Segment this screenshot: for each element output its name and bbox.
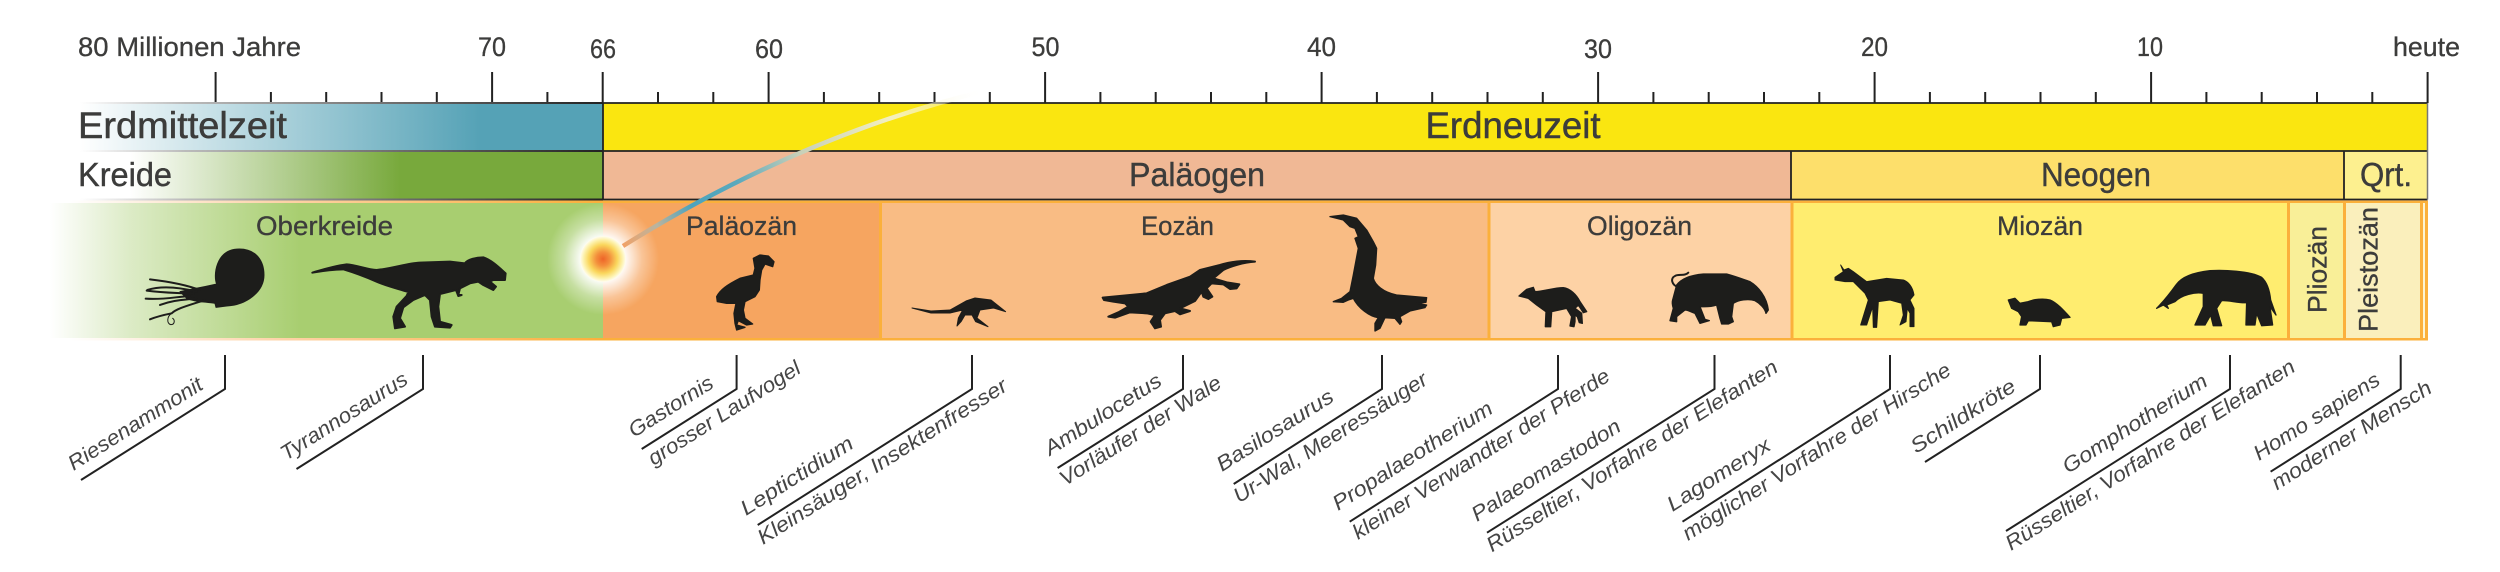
callout: Lagomeryx: Lagomeryx bbox=[1663, 433, 1776, 516]
epoch: Pliozän: Pliozän bbox=[2302, 226, 2332, 313]
period: Neogen: Neogen bbox=[2041, 156, 2151, 193]
period: Kreide bbox=[78, 151, 603, 200]
era: Erdmittelzeit bbox=[78, 103, 603, 151]
period: Quartär: Qrt. bbox=[2360, 156, 2412, 193]
callout: Schildkröte: Schildkröte bbox=[1906, 375, 2020, 458]
epoch: Paläozän: Paläozän bbox=[686, 211, 797, 241]
epoch: Pliozän bbox=[2288, 203, 2344, 338]
epoch: Miozän: Miozän bbox=[1997, 211, 2083, 241]
epoch: Eozän bbox=[880, 203, 1488, 338]
icon: ambulocetus bbox=[1103, 261, 1255, 328]
callout: Gomphotherium: Rüsseltier, Vorfahre der Elefanten bbox=[2001, 355, 2299, 555]
callout: Riesenammonit bbox=[64, 355, 225, 480]
era: Erdmittelzeit: Erdmittelzeit bbox=[78, 105, 288, 146]
period: Neogen bbox=[1791, 151, 2344, 200]
callout: Lagomeryx: möglicher Vorfahre der Hirsche bbox=[1678, 359, 1955, 545]
axis labels: 70 bbox=[478, 32, 506, 62]
callout: Homo sapiens: moderner Mensch bbox=[2267, 376, 2436, 495]
icon: ammonite bbox=[146, 249, 264, 325]
callout: Ambulocetus: Ambulocetus bbox=[1039, 369, 1166, 461]
icon: turtle bbox=[2008, 298, 2070, 327]
callout: Basilosaurus: Ur-Wal, Meeressäuger bbox=[1229, 367, 1433, 508]
axis labels: 30 bbox=[1584, 34, 1612, 64]
callout: Leptictidium: Leptictidium bbox=[736, 432, 858, 520]
period: Paläogen: Paläogen bbox=[1129, 156, 1265, 193]
callout: Riesenammonit: Riesenammonit bbox=[64, 372, 208, 475]
era: Erdneuzeit bbox=[603, 103, 2428, 151]
callout: Homo sapiens: Homo sapiens bbox=[2249, 368, 2385, 465]
callout: Propalaeotherium: Propalaeotherium bbox=[1328, 397, 1497, 515]
callout: Gomphotherium: Gomphotherium bbox=[2058, 370, 2212, 478]
callout: Palaeomastodon: Rüsseltier, Vorfahre der Elefanten bbox=[1482, 356, 1782, 557]
epoch: Oligozän: Oligozän bbox=[1587, 211, 1692, 241]
icon: basilosaurus bbox=[1330, 215, 1427, 331]
icon: gomphotherium bbox=[2157, 270, 2276, 326]
time axis bbox=[78, 32, 2460, 103]
epoch: Eozän: Eozän bbox=[1141, 211, 1214, 241]
axis labels: 40 bbox=[1307, 32, 1336, 62]
axis labels: 50 bbox=[1032, 32, 1060, 62]
impact glow and meteor trail bbox=[550, 98, 952, 312]
epoch band bbox=[50, 200, 2428, 340]
axis labels: 10 bbox=[2137, 32, 2163, 62]
period: Quartär bbox=[2344, 151, 2428, 200]
period: Kreide: Kreide bbox=[78, 156, 172, 193]
callout: Palaeomastodon: Palaeomastodon bbox=[1467, 415, 1625, 526]
axis labels: 66 bbox=[590, 34, 616, 64]
icon: gastornis bbox=[717, 255, 774, 330]
icon: tyrannosaurus bbox=[312, 257, 506, 328]
axis ticks bbox=[216, 72, 2428, 103]
icon: leptictidium bbox=[912, 298, 1006, 327]
epoch: Pleistozän bbox=[2344, 203, 2422, 338]
epoch: Paläozän bbox=[603, 203, 880, 338]
callout: Gastornis: Gastornis bbox=[624, 371, 718, 442]
era: Erdneuzeit: Erdneuzeit bbox=[1426, 105, 1601, 146]
epoch: Oligozän bbox=[1488, 203, 1791, 338]
callout: Tyrannosaurus: Tyrannosaurus bbox=[276, 367, 413, 465]
axis labels: 60 bbox=[755, 34, 783, 64]
icon: palaeomastodon bbox=[1670, 273, 1768, 324]
epoch: Oberkreide: Oberkreide bbox=[256, 211, 393, 241]
axis labels bbox=[78, 32, 2460, 64]
callout: Homo sapiens bbox=[2249, 355, 2436, 495]
period band bbox=[78, 151, 2428, 200]
epoch: Oberkreide bbox=[50, 203, 603, 338]
icon: propalaeotherium bbox=[1519, 287, 1587, 327]
callout: Ambulocetus: Vorläufer der Wale bbox=[1055, 371, 1226, 491]
period: Paläogen bbox=[603, 151, 1791, 200]
icon: lagomeryx bbox=[1835, 265, 1914, 327]
callout: Gastornis: grosser Laufvogel bbox=[644, 356, 806, 470]
axis labels: 20 bbox=[1861, 32, 1888, 62]
epoch: Miozän bbox=[1791, 203, 2288, 338]
callout: Propalaeotherium: kleiner Verwandter der Pferde bbox=[1348, 364, 1614, 544]
callout: Leptictidium: Kleinsäuger, Insektenfresser bbox=[753, 374, 1013, 549]
callout: Schildkröte bbox=[1906, 355, 2040, 462]
axis labels: 80 Millionen Jahre bbox=[78, 32, 301, 62]
callout: Basilosaurus: Basilosaurus bbox=[1212, 385, 1338, 476]
era band bbox=[78, 103, 2428, 151]
epoch: Pleistozän: Pleistozän bbox=[2354, 207, 2384, 332]
axis labels: heute bbox=[2393, 32, 2460, 62]
